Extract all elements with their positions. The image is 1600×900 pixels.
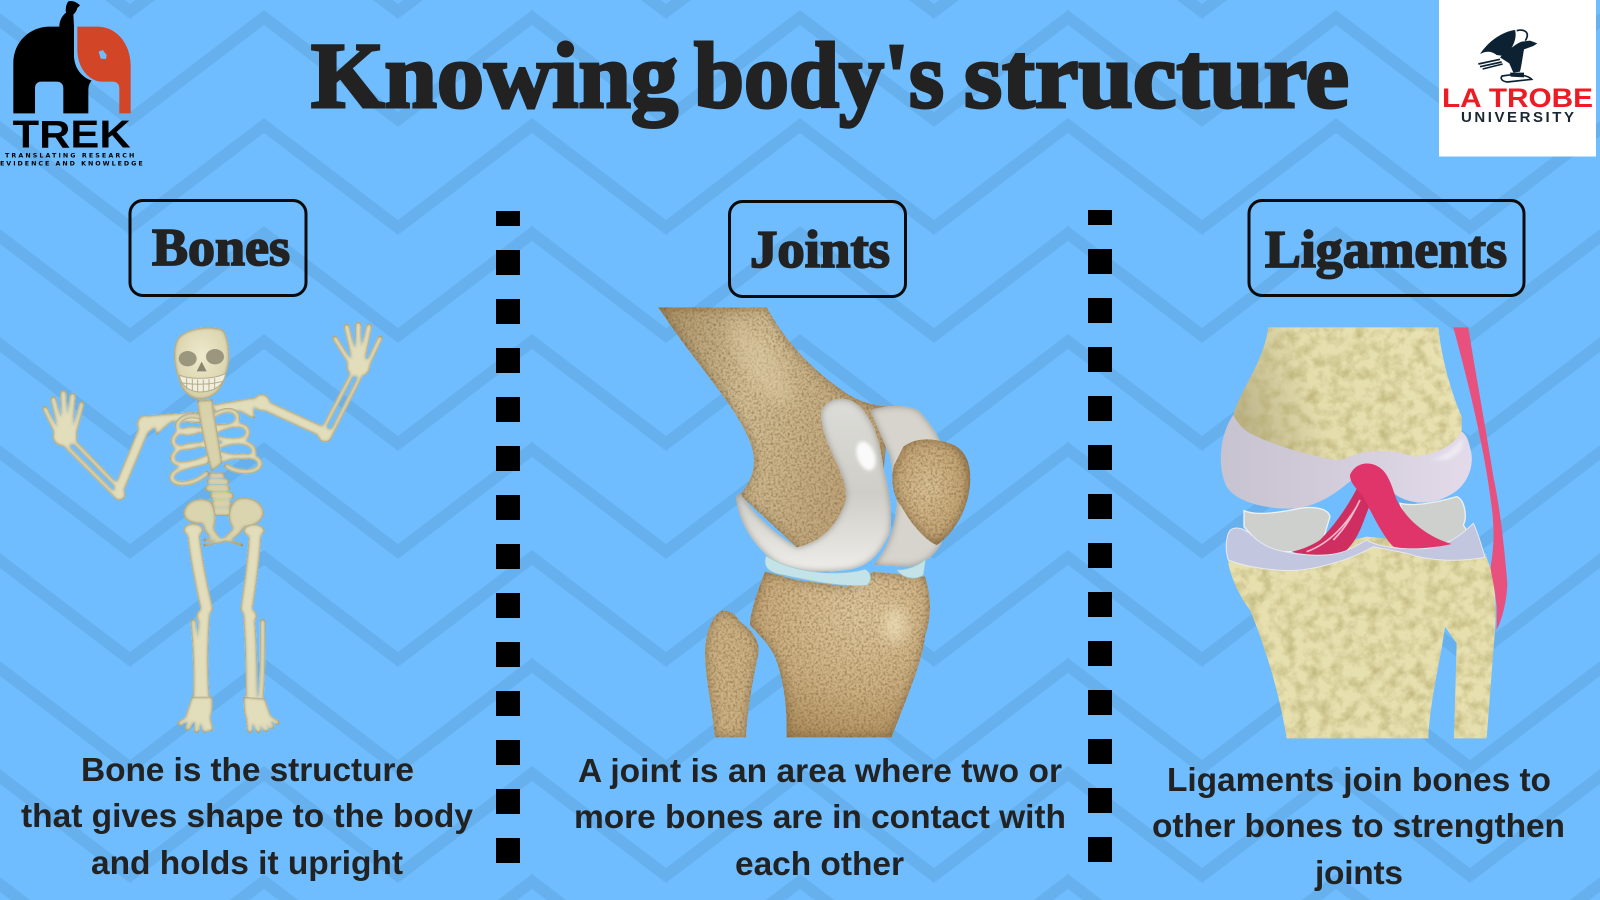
text block: ligaments: Ligaments join bones to — [1167, 762, 1551, 799]
meniscus left — [1244, 507, 1330, 552]
logo: La Trobe University — [1439, 0, 1596, 156]
logo: TREK — [0, 1, 143, 168]
femur shaft highlight — [718, 313, 802, 414]
TREK tagline line 2: EVIDENCE AND KNOWLEDGE — [0, 161, 143, 168]
left arm and hand — [45, 393, 202, 501]
dotted divider: right — [1088, 210, 1112, 862]
icon: elephant red half — [77, 27, 131, 113]
heading: Ligaments: Ligaments — [1265, 221, 1507, 279]
text block: bones: Bone is the structure — [81, 752, 414, 789]
collateral ligament — [1453, 327, 1507, 630]
tibia — [750, 572, 930, 737]
cartilage highlight — [853, 439, 879, 473]
text block: bones: and holds it upright — [91, 845, 403, 882]
icon: eagle — [1478, 30, 1537, 82]
text block: joints: each other — [735, 846, 904, 883]
TREK wordmark: TREK — [13, 112, 131, 156]
meniscus right — [1400, 497, 1468, 548]
title: body's — [694, 25, 944, 128]
sternum and spine — [197, 399, 234, 516]
icon: elephant with rider, black half — [13, 1, 92, 113]
anterior cruciate ligament — [1350, 463, 1452, 548]
text block: bones — [21, 752, 473, 882]
La Trobe wordmark: LA TROBE — [1442, 83, 1593, 113]
title: Knowing — [311, 25, 678, 128]
meniscus — [765, 556, 926, 586]
femur — [658, 307, 890, 557]
heading: Bones: Bones — [152, 219, 290, 277]
ligament highlights — [1307, 500, 1360, 552]
heading: Bones — [130, 200, 306, 296]
skull — [174, 327, 229, 399]
posterior cruciate ligament — [1292, 483, 1369, 555]
fibula — [705, 611, 759, 737]
text block: ligaments: other bones to strengthen — [1152, 808, 1565, 845]
tibia highlight — [883, 607, 907, 643]
text block: bones: that gives shape to the body — [21, 798, 473, 835]
heading: Joints: Joints — [750, 221, 890, 279]
tibia and fibula — [1228, 537, 1496, 738]
University wordmark: UNIVERSITY — [1461, 109, 1574, 126]
trochlea cartilage — [870, 406, 942, 567]
cartilage sheen — [1430, 438, 1463, 460]
rib cage — [172, 410, 260, 484]
legs — [183, 523, 265, 700]
dotted divider: left — [496, 211, 520, 863]
feet — [180, 697, 277, 730]
pelvis — [183, 497, 264, 545]
femoral condyle cartilage — [736, 399, 891, 572]
tibial plateau — [1226, 523, 1485, 571]
title — [311, 25, 1349, 128]
right arm and hand — [210, 325, 380, 442]
femoral cartilage — [1221, 415, 1472, 509]
text block: joints: more bones are in contact with — [574, 799, 1066, 836]
illustration: knee joint side view — [658, 307, 970, 737]
text block: ligaments — [1152, 762, 1565, 892]
text block: ligaments: joints — [1314, 855, 1403, 892]
femur — [1233, 327, 1462, 470]
text block: joints — [574, 753, 1066, 883]
heading: Ligaments — [1249, 200, 1524, 296]
text block: joints: A joint is an area where two or — [578, 753, 1062, 790]
illustration: knee ligaments front view — [1221, 327, 1507, 738]
TREK tagline line 1: TRANSLATING RESEARCH — [5, 152, 134, 159]
heading: Joints — [730, 202, 906, 296]
patella — [892, 439, 970, 545]
title: structure — [964, 25, 1349, 128]
illustration: skeleton — [45, 325, 380, 730]
